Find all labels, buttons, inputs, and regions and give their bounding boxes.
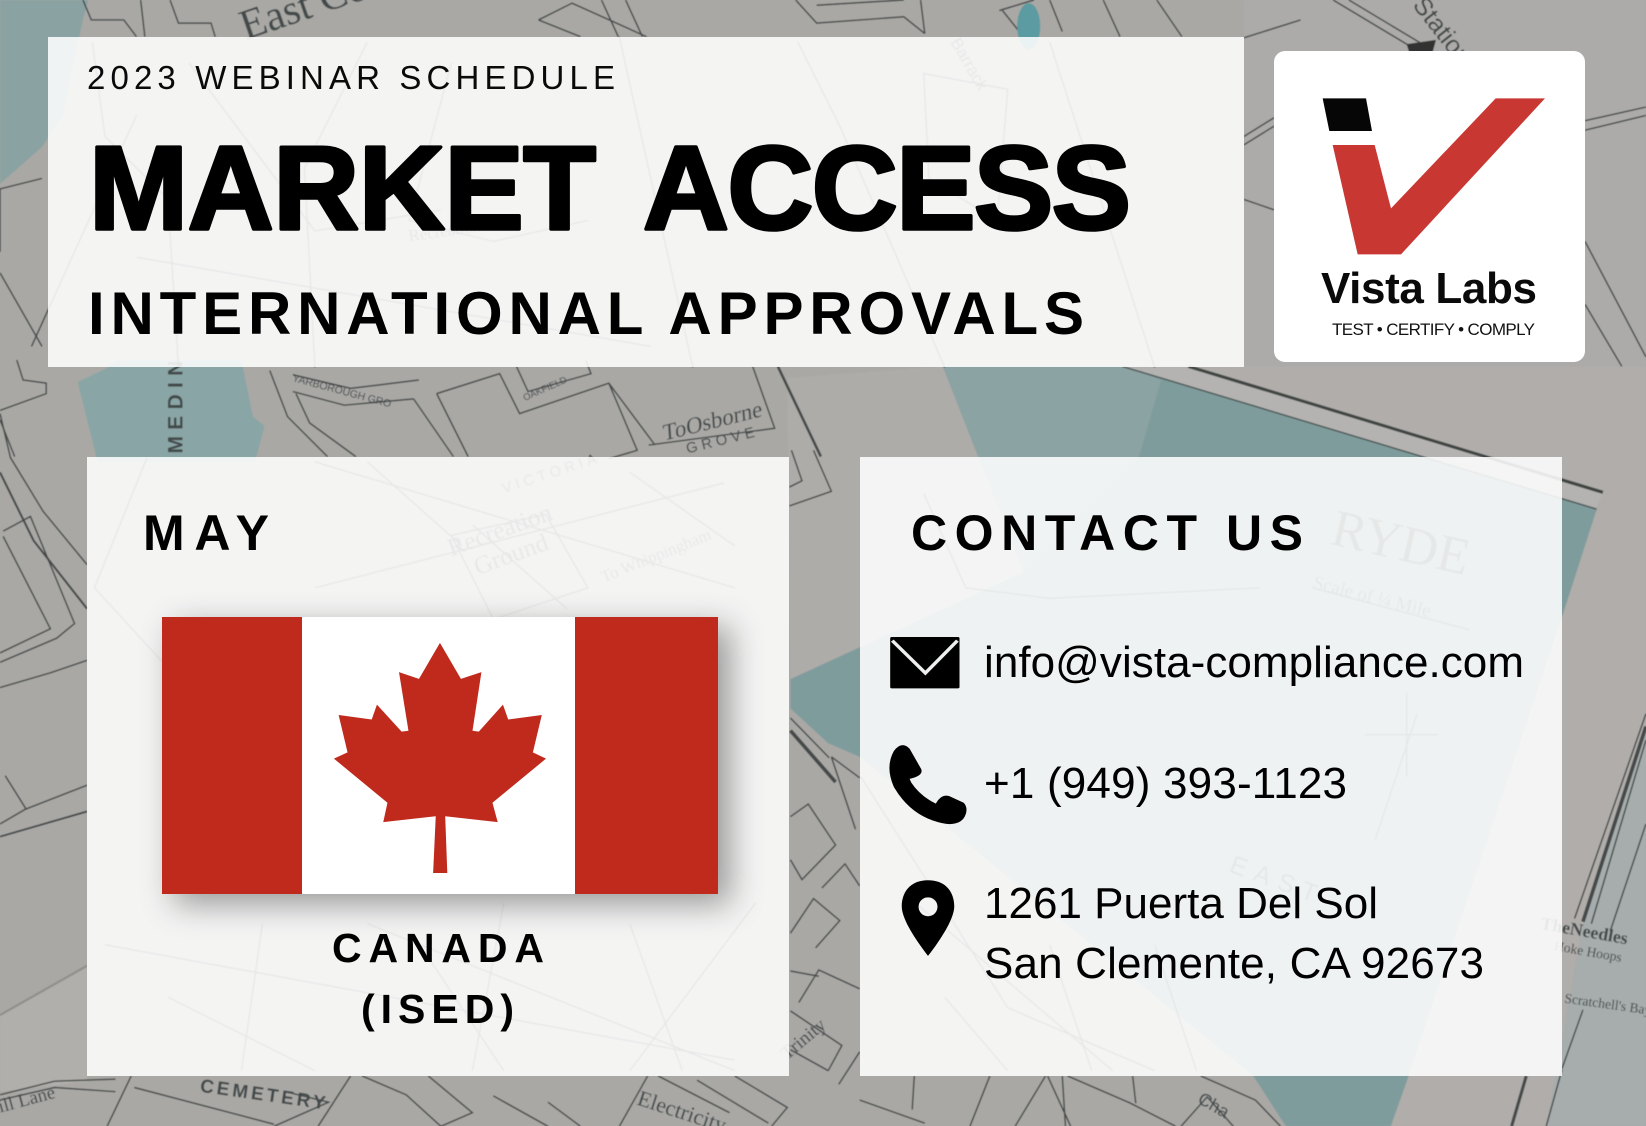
icon: Canadian flag xyxy=(162,617,718,894)
background: vintage map: CEMETERY xyxy=(199,1076,330,1115)
background: vintage map: TheNeedles xyxy=(1539,913,1630,948)
heading: May: MAY xyxy=(143,505,269,561)
icon: phone xyxy=(889,745,966,824)
background: vintage map: MEDIN xyxy=(165,354,188,453)
subtitle: 2023 WEBINAR SCHEDULE xyxy=(87,59,615,96)
under-panel map xyxy=(31,37,1155,367)
top strip xyxy=(83,0,1301,38)
background: vintage map: EAST xyxy=(1226,851,1329,911)
heading: contact us: CONTACT US xyxy=(911,505,1303,561)
address xyxy=(984,879,1484,988)
background: vintage map: Cha xyxy=(1195,1088,1233,1122)
background: vintage map: Hoke Hoops xyxy=(1553,938,1623,965)
icon: Vista Labs mark xyxy=(1323,98,1545,254)
teal edges and paper lines xyxy=(1188,366,1603,492)
country label xyxy=(332,925,544,1032)
background: vintage map: Ground xyxy=(470,529,552,581)
icon: location pin xyxy=(902,880,954,956)
title xyxy=(89,122,1131,255)
right of header xyxy=(1244,0,1646,366)
panel: contact xyxy=(860,457,1562,1076)
title: MARKET xyxy=(89,122,596,255)
panel: header xyxy=(48,37,1244,367)
background: vintage map: VICTORIA xyxy=(500,450,603,497)
background: vintage map: ToOsborne xyxy=(662,396,763,447)
background: vintage map: Scale of ¼ Mile xyxy=(1311,572,1433,622)
title: ACCESS xyxy=(643,122,1131,255)
background: vintage map: OAKFIELD xyxy=(522,375,569,404)
background: vintage map: RYDE xyxy=(1326,499,1476,587)
logo wordmark: Vista Labs xyxy=(1321,264,1537,313)
email: info@vista-compliance.com xyxy=(984,638,1524,687)
country label: (ISED) xyxy=(361,986,514,1032)
phone number: +1 (949) 393-1123 xyxy=(984,759,1347,808)
address: 1261 Puerta Del Sol xyxy=(984,879,1378,928)
icon: envelope xyxy=(890,637,960,688)
background: vintage map: Recreation Gd xyxy=(407,213,507,245)
subtitle: international approvals: INTERNATIONAL APPROVALS xyxy=(88,280,1084,347)
panel: month xyxy=(87,457,789,1076)
background: vintage map: Barrack xyxy=(947,34,992,95)
logo tagline: TEST • CERTIFY • COMPLY xyxy=(1332,320,1535,339)
gutter between panels xyxy=(789,450,860,1084)
background: vintage map: Recreation xyxy=(444,499,556,562)
background: vintage map: YARBOROUGH GRO xyxy=(291,373,392,410)
left edge xyxy=(0,472,87,609)
background: vintage map: GROVE xyxy=(685,424,760,457)
background: vintage map: To Whippingham xyxy=(598,525,714,586)
panel: logo xyxy=(1274,51,1585,362)
country label: CANADA xyxy=(332,925,544,971)
address: San Clemente, CA 92673 xyxy=(984,939,1484,988)
background: vintage map: Trinity xyxy=(777,1014,831,1064)
strip between panels xyxy=(0,360,775,459)
bottom strip xyxy=(0,1076,787,1126)
